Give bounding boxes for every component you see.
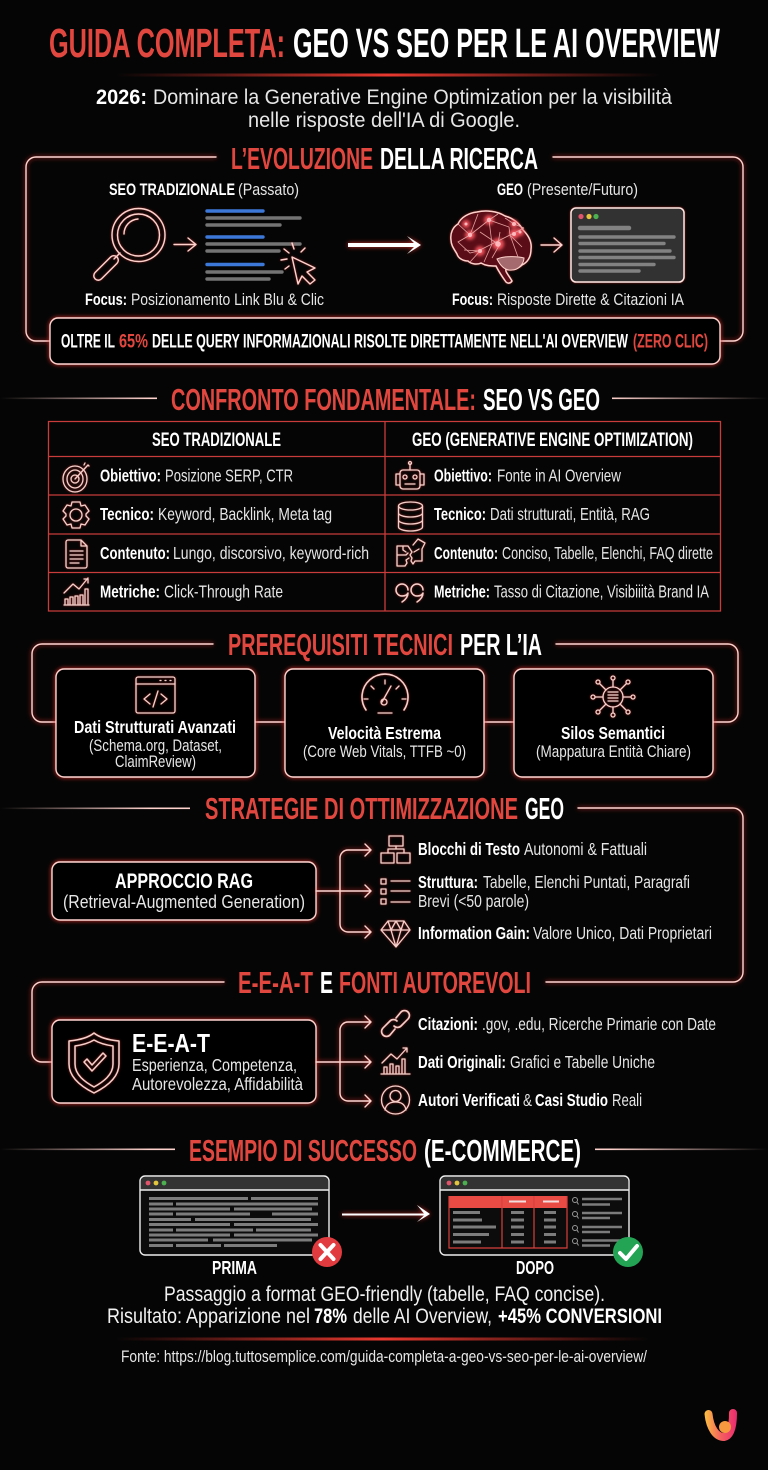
text: blocchi di testo: Autonomi & Fattuali <box>524 839 647 859</box>
text: dati originali: Grafici e Tabelle Uniche <box>510 1052 655 1072</box>
text: dati strutturati <box>74 717 236 771</box>
icon: database <box>398 502 422 531</box>
row: contenuto: Contenuto: <box>100 543 170 563</box>
row: metriche: Metriche: <box>434 582 490 602</box>
text: velocita estrema: Velocità Estrema <box>328 723 441 743</box>
subtitle: 2026: <box>96 86 147 109</box>
box: e-e-a-t: Autorevolezza, Affidabilità <box>132 1074 303 1094</box>
icon: hierarchy <box>381 836 410 863</box>
icon: magnifying glass <box>92 208 165 282</box>
panel: strategie GEO <box>0 791 743 982</box>
subtitle <box>96 86 672 132</box>
row: tecnico <box>100 504 650 524</box>
box: approccio RAG <box>52 862 316 920</box>
row: tecnico: Tecnico: <box>100 504 154 524</box>
text: dati strutturati: (Schema.org, Dataset, <box>89 737 222 755</box>
heading: strategie: GEO <box>525 791 564 826</box>
row: contenuto <box>100 543 713 563</box>
badge: error <box>312 1237 342 1267</box>
row: metriche: Metriche: <box>100 582 160 602</box>
card: velocita estrema <box>285 669 484 777</box>
heading: esempio: (E-COMMERCE) <box>424 1133 581 1168</box>
text: autori verificati <box>418 1090 642 1110</box>
text: silos semantici: (Mappatura Entità Chiare) <box>536 743 691 761</box>
callout: 65% zero click: 65% <box>119 330 148 352</box>
row: obiettivo: Posizione SERP, CTR <box>165 466 293 486</box>
window: prima <box>140 1176 329 1255</box>
panel: E-E-A-T e fonti autorevoli <box>32 965 716 1114</box>
icon: gear <box>63 502 89 528</box>
text: information gain: Information Gain: <box>418 923 530 943</box>
panel: evoluzione della ricerca <box>26 141 743 364</box>
focus: SEO: Posizionamento Link Blu & Clic <box>131 290 324 309</box>
text: information gain <box>418 923 712 943</box>
title <box>49 20 720 66</box>
row: tecnico: Keyword, Backlink, Meta tag <box>158 504 332 524</box>
row: obiettivo <box>100 466 621 486</box>
panel: esempio di successo <box>0 1133 768 1328</box>
panel: prerequisiti tecnici <box>32 627 738 777</box>
label: SEO tradizionale: (Passato) <box>238 180 299 199</box>
row: obiettivo: Obiettivo: <box>100 466 161 486</box>
text: struttura: Tabelle, Elenchi Puntati, Paragrafi <box>483 872 690 892</box>
arrow <box>541 238 562 252</box>
box: approccio RAG: APPROCCIO RAG <box>115 870 253 893</box>
text: information gain: Valore Unico, Dati Proprietari <box>533 923 712 943</box>
label: SEO tradizionale: SEO TRADIZIONALE <box>109 180 235 199</box>
result text: Risultato: Apparizione nel <box>107 1305 310 1328</box>
text: dati originali: Dati Originali: <box>418 1052 506 1072</box>
focus: GEO: Risposte Dirette & Citazioni IA <box>497 290 685 309</box>
text: dati originali <box>418 1052 655 1072</box>
callout: 65% zero click: (ZERO CLIC) <box>633 330 708 352</box>
focus: SEO: Focus: <box>85 290 127 309</box>
logo <box>708 1413 733 1437</box>
heading: strategie: STRATEGIE DI OTTIMIZZAZIONE <box>205 791 518 826</box>
icon: AI answer window <box>571 208 684 282</box>
badge: success <box>613 1237 643 1267</box>
text: velocita estrema <box>303 723 466 761</box>
row: contenuto: Lungo, discorsivo, keyword-rich <box>173 543 369 563</box>
text: autori verificati: & <box>523 1090 532 1110</box>
arrows: e-e-a-t branches <box>316 1016 371 1107</box>
box: e-e-a-t: E-E-A-T <box>132 1028 210 1058</box>
box: approccio RAG: (Retrieval-Augmented Generation) <box>63 891 305 912</box>
label: prima: PRIMA <box>212 1258 257 1278</box>
row: tecnico: Tecnico: <box>434 504 486 524</box>
icon: target <box>63 463 89 492</box>
label: dopo: DOPO <box>516 1258 554 1278</box>
row: obiettivo: Fonte in AI Overview <box>497 466 621 486</box>
icon: shield <box>69 1033 119 1093</box>
source: Fonte: https://blog.tuttosemplice.com/guida-completa-a-geo-vs-seo-per-le-ai-overview/ <box>121 1348 647 1366</box>
text: autori verificati: Casi Studio <box>535 1090 608 1110</box>
icon: code window <box>136 677 175 713</box>
arrow <box>174 238 196 251</box>
heading: e-e-a-t: FONTI AUTOREVOLI <box>339 965 531 1000</box>
label: GEO: (Presente/Futuro) <box>527 180 638 199</box>
heading: evoluzione: L’EVOLUZIONE <box>231 141 373 176</box>
focus: GEO <box>452 290 685 309</box>
heading: e-e-a-t <box>238 965 531 1000</box>
card: silos semantici <box>514 669 713 777</box>
text: struttura: Struttura: <box>418 872 478 892</box>
text: struttura: Brevi (<50 parole) <box>418 891 529 911</box>
text: dati strutturati: Dati Strutturati Avanzati <box>74 717 236 737</box>
focus: SEO <box>85 290 324 309</box>
text: blocchi di testo: Blocchi di Testo <box>418 839 520 859</box>
callout: 65% zero click: OLTRE IL <box>61 330 115 352</box>
window: dopo <box>440 1176 629 1255</box>
result text: +45% CONVERSIONI <box>498 1305 662 1328</box>
arrows: RAG branches <box>316 844 371 938</box>
table headers <box>152 430 693 451</box>
heading: prerequisiti: PER L’IA <box>460 627 542 662</box>
frame: prerequisiti <box>32 644 738 722</box>
subtitle: Dominare la Generative Engine Optimization per la visibilità <box>153 86 672 109</box>
icon: gauge <box>362 674 408 713</box>
text: velocita estrema: (Core Web Vitals, TTFB ~0) <box>303 743 466 761</box>
search result lines <box>207 211 300 279</box>
icon: data chart <box>381 1048 410 1074</box>
panel: confronto SEO vs GEO <box>0 382 768 611</box>
frame: evoluzione <box>26 157 743 341</box>
row: tecnico: Dati strutturati, Entità, RAG <box>490 504 650 524</box>
table headers: SEO TRADIZIONALE <box>152 430 281 451</box>
title: GUIDA COMPLETA: <box>49 20 285 66</box>
icon: list <box>381 879 410 904</box>
icon: semantic network <box>591 676 635 717</box>
icon: click cursor <box>281 243 315 284</box>
card: dati strutturati <box>56 669 255 777</box>
connector: e-e-a-t frame <box>32 982 224 1062</box>
icon: quotation marks <box>396 584 423 602</box>
icon: diamond <box>381 921 410 947</box>
heading: esempio: ESEMPIO DI SUCCESSO <box>189 1133 417 1168</box>
row: obiettivo: Obiettivo: <box>434 466 492 486</box>
icon: brain <box>451 211 531 283</box>
text: citazioni <box>418 1014 716 1034</box>
callout: 65% zero click <box>50 318 720 364</box>
row: metriche: Click-Through Rate <box>164 582 283 602</box>
icon: document <box>66 540 87 568</box>
comparison table <box>48 422 720 611</box>
arrow: prima to dopo <box>342 1205 430 1222</box>
result text <box>107 1283 662 1328</box>
text: autori verificati: Autori Verificati <box>418 1090 520 1110</box>
heading: confronto: SEO VS GEO <box>483 382 600 417</box>
text: struttura <box>418 872 690 911</box>
text: citazioni: Citazioni: <box>418 1014 478 1034</box>
text: silos semantici <box>536 723 691 761</box>
result text: Passaggio a format GEO-friendly (tabelle, FAQ concise). <box>164 1283 605 1306</box>
icon: author <box>382 1086 410 1114</box>
focus: GEO: Focus: <box>452 290 493 309</box>
result text: delle AI Overview, <box>353 1305 492 1328</box>
result text: 78% <box>314 1305 347 1328</box>
heading: e-e-a-t: E-E-A-T <box>238 965 313 1000</box>
label: GEO: GEO <box>497 180 523 199</box>
icon: link <box>382 1011 409 1036</box>
heading: prerequisiti: PREREQUISITI TECNICI <box>228 627 453 662</box>
text: blocchi di testo <box>418 839 647 859</box>
text: dati strutturati: ClaimReview) <box>115 753 196 771</box>
icon: growth chart <box>64 578 89 605</box>
heading: evoluzione: DELLA RICERCA <box>380 141 538 176</box>
connector: strategie to e-e-a-t <box>546 808 743 982</box>
label: GEO <box>497 180 638 199</box>
subtitle: nelle risposte dell'IA di Google. <box>248 109 520 132</box>
box: e-e-a-t <box>52 1020 316 1103</box>
heading: confronto: CONFRONTO FONDAMENTALE: <box>171 382 476 417</box>
text: autori verificati: Reali <box>612 1090 642 1110</box>
box: e-e-a-t: Esperienza, Competenza, <box>132 1055 297 1075</box>
arrow: main evolution <box>348 236 421 254</box>
icon: robot <box>396 462 424 489</box>
text: silos semantici: Silos Semantici <box>561 723 665 743</box>
heading: e-e-a-t: E <box>320 965 333 1000</box>
row: contenuto: Contenuto: <box>434 543 498 563</box>
row: metriche <box>100 582 709 602</box>
icon: puzzle <box>397 539 425 566</box>
